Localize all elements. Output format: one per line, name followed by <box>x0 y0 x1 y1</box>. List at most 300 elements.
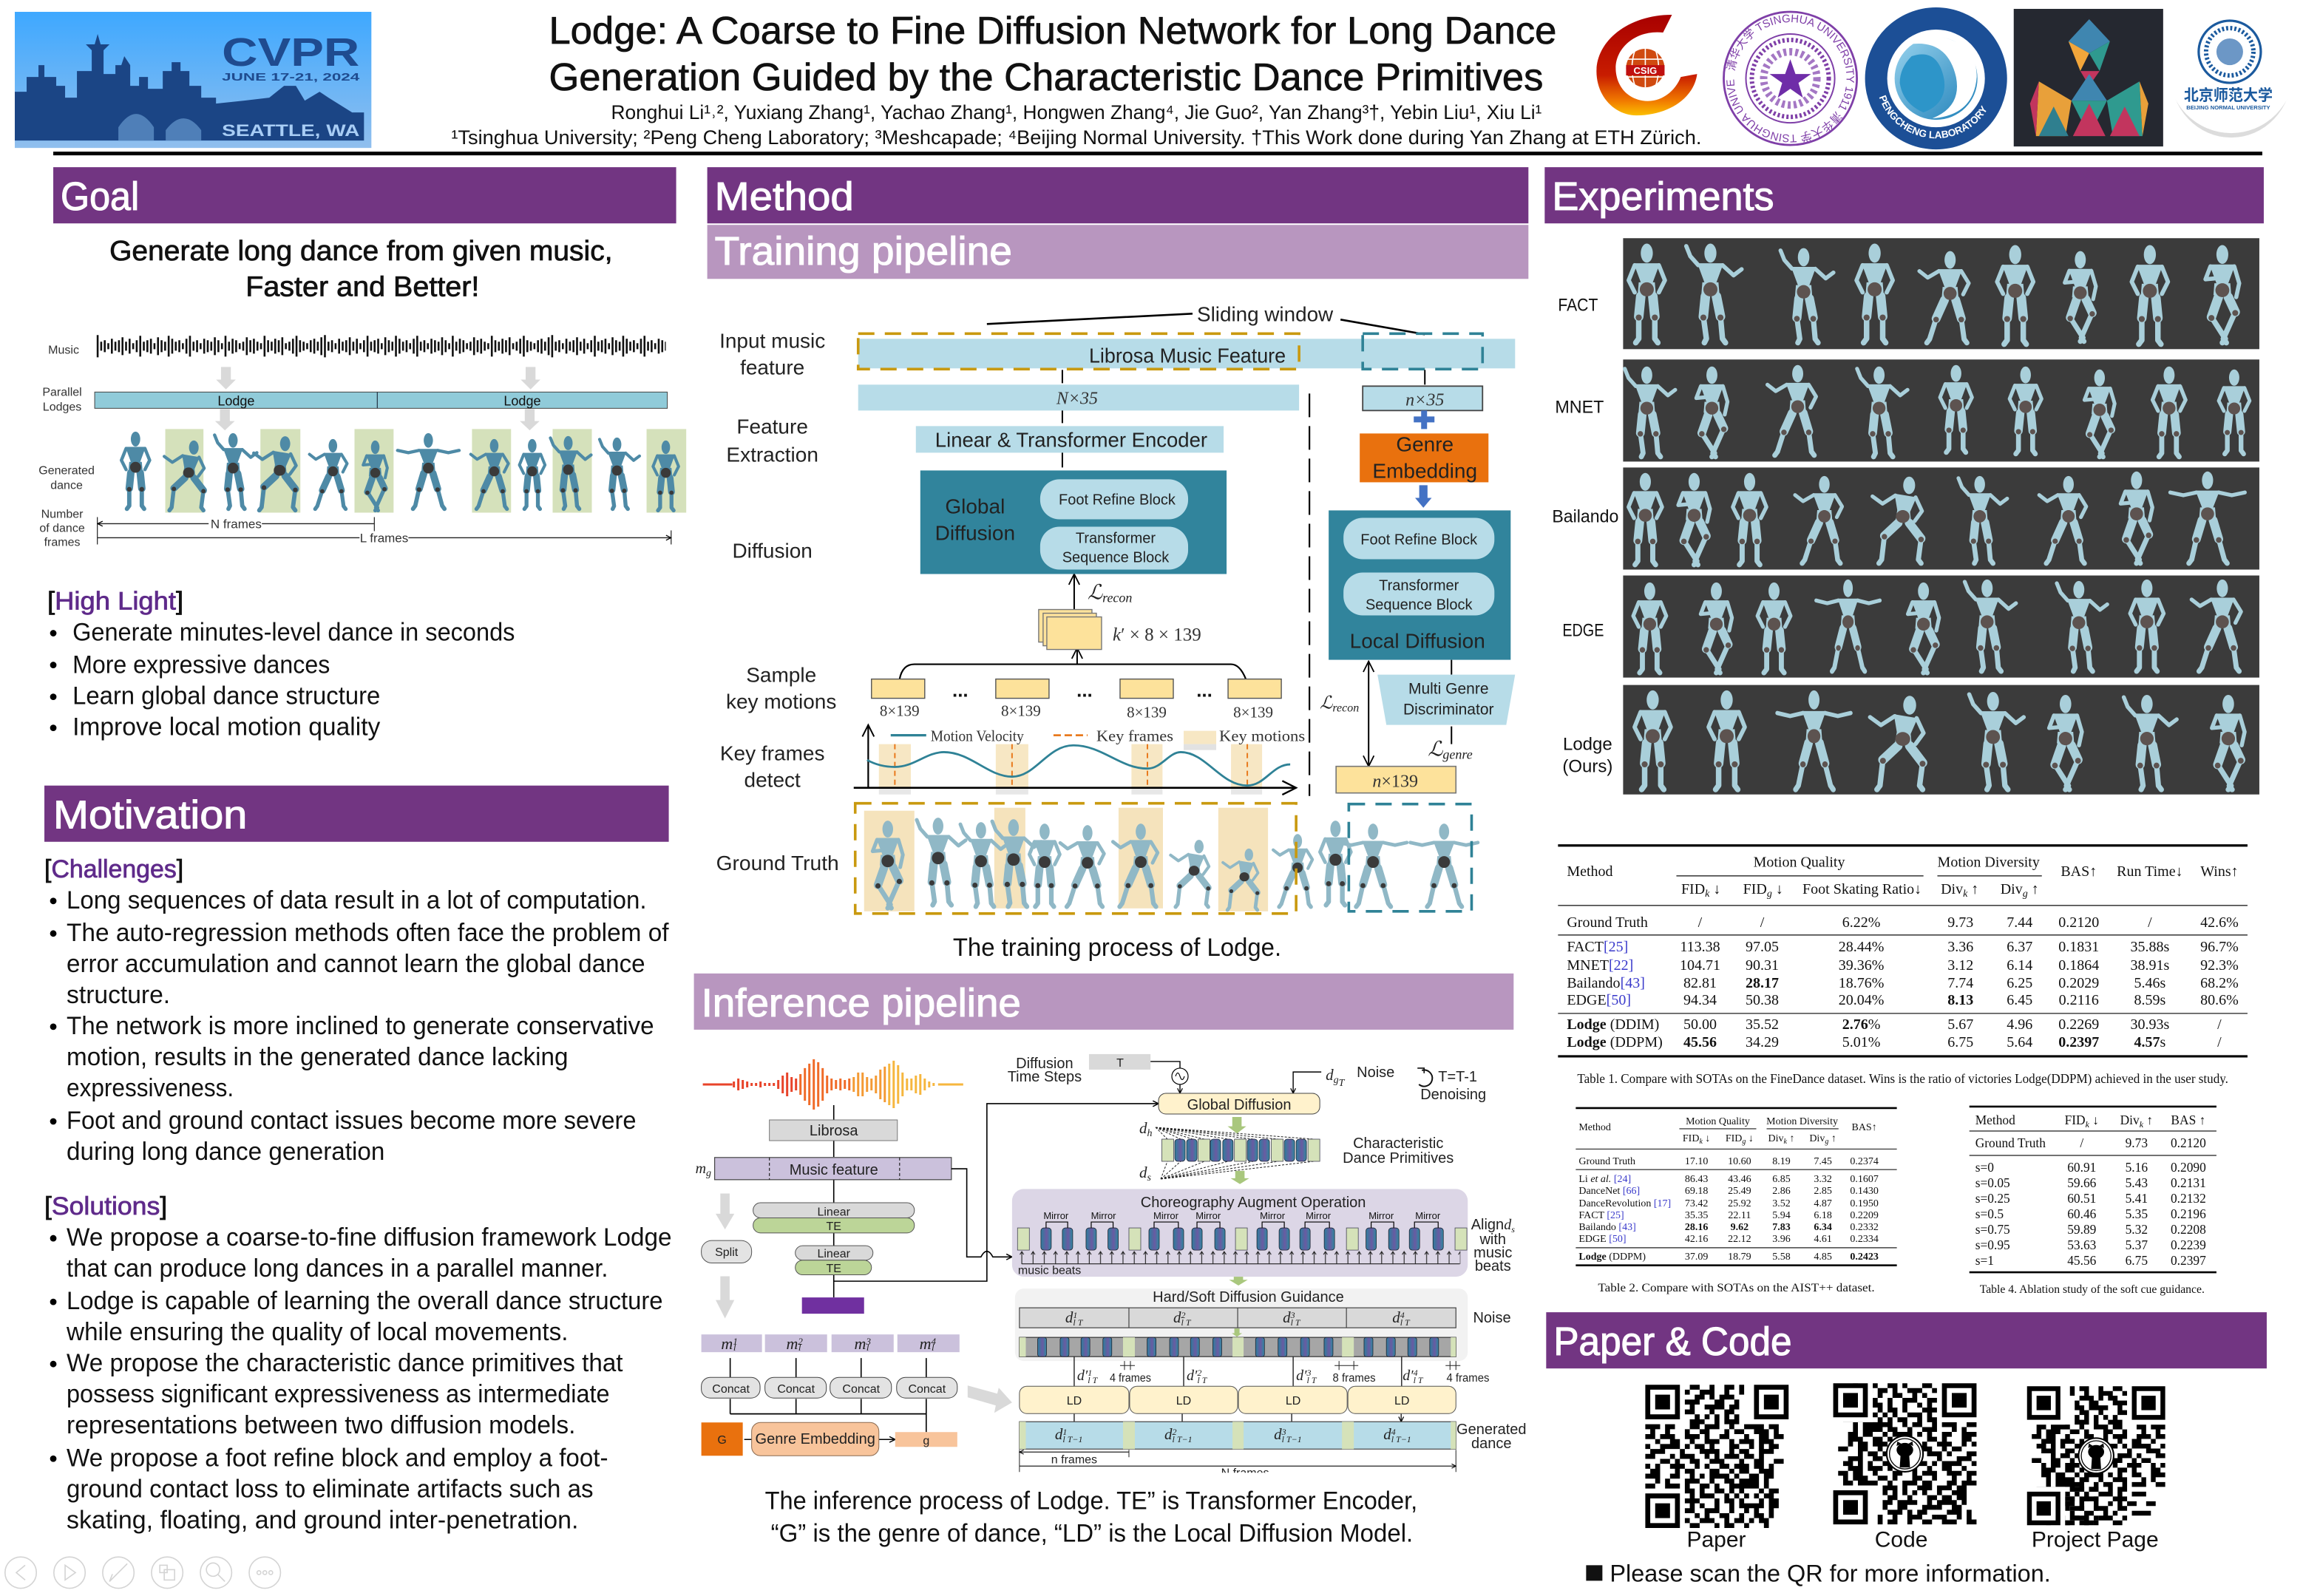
text: Solutions: Lodge is capable of learning the overall dance structure <box>67 1287 663 1315</box>
concat pills: Concat <box>842 1383 881 1396</box>
text: Solutions: We propose the characteristic dance primitives that <box>67 1349 623 1377</box>
table 2: AIST++ comparison: DanceNet [66] <box>1578 1186 1640 1197</box>
music waveform <box>96 335 666 358</box>
heading: Goal <box>53 167 676 223</box>
ground truth strip <box>855 804 1478 914</box>
denoising note <box>1417 1068 1486 1103</box>
table 1 caption: Table 1. Compare with SOTAs on the FineDance dataset. Wins is the ratio of victories Lodge(DDPM) achieved in the user study. <box>1577 1071 2228 1086</box>
overlap frame labels: 8 frames <box>1333 1372 1376 1385</box>
local transformer block <box>1343 573 1494 616</box>
table 1 baseline rows: 28.17 <box>1746 975 1779 991</box>
overlap frame labels: d′ <box>1077 1368 1088 1384</box>
align note: with <box>1479 1232 1506 1248</box>
generated segments: d <box>1164 1425 1173 1443</box>
table 4: soft cue ablation: 59.89 <box>2067 1222 2096 1237</box>
CVPR 2024 logo <box>15 12 371 148</box>
arrow: genre to local diffusion <box>1415 485 1431 508</box>
split music features: l <box>733 1342 736 1353</box>
table 1: FineDance comparison: FID <box>1681 881 1705 897</box>
small linear and TE stack: TE <box>826 1263 841 1275</box>
choreography augment operation: Mirror <box>1043 1210 1069 1221</box>
heading: Training pipeline <box>708 225 1528 279</box>
table 1 baseline rows: 82.81 <box>1683 975 1717 991</box>
QR: Project Page <box>2027 1386 2165 1552</box>
comparison row: Lodge (Ours): Lodge <box>1563 735 1612 755</box>
frame dimension lines: L frames <box>360 531 408 545</box>
table 4: soft cue ablation: 0.2132 <box>2171 1191 2206 1206</box>
noise segments <box>1020 1308 1456 1328</box>
table 4: soft cue ablation: 5.41 <box>2126 1191 2148 1206</box>
g box <box>895 1432 957 1447</box>
plus icon <box>1414 410 1434 429</box>
table 2: AIST++ comparison: 5.58 <box>1772 1252 1791 1263</box>
choreography augment operation: Mirror <box>1415 1210 1441 1221</box>
table 1 Lodge rows: 35.52 <box>1746 1016 1779 1033</box>
text: High Light: Learn global dance structure <box>72 682 380 710</box>
table 4: soft cue ablation: ↓ <box>2089 1113 2099 1127</box>
table 4: soft cue ablation: s=0 <box>1975 1160 1994 1175</box>
local diffusion boxes: LD <box>1286 1395 1300 1407</box>
table 4: soft cue ablation: BAS ↑ <box>2171 1113 2205 1127</box>
split music features: m <box>855 1334 866 1353</box>
text: High Light: Improve local motion quality <box>72 713 380 741</box>
table 1 Lodge rows: 30.93s <box>2130 1016 2169 1033</box>
table 1: FineDance comparison: Div <box>2001 881 2023 897</box>
panel: Paper and Code <box>1546 1312 2267 1586</box>
table 1 ground truth row <box>1567 914 2239 931</box>
table 1 Lodge rows: / <box>2217 1016 2222 1033</box>
table 1 baseline rows: 0.2029 <box>2058 975 2099 991</box>
table 4: soft cue ablation: 6.75 <box>2126 1253 2148 1268</box>
global diffusion box: Global Diffusion <box>1187 1097 1291 1113</box>
split music features: l <box>932 1342 935 1353</box>
table 2: AIST++ comparison: 69.18 <box>1685 1186 1708 1197</box>
local foot refine block <box>1343 517 1494 559</box>
table 1 baseline rows: 35.88s <box>2130 939 2169 955</box>
lodge bar <box>95 392 668 408</box>
table 4: soft cue ablation: 59.66 <box>2067 1175 2097 1190</box>
table 1: FineDance comparison: g <box>2023 889 2028 900</box>
generated segments: l T−1 <box>1391 1434 1411 1444</box>
noise segments: l T <box>1073 1317 1084 1328</box>
n x 139 box: n×139 <box>1372 772 1418 792</box>
music feature box <box>696 1158 952 1180</box>
table 2: AIST++ comparison: Div <box>1809 1133 1825 1144</box>
table 2: AIST++ comparison: Method <box>1578 1122 1611 1133</box>
split music features: m <box>786 1334 798 1353</box>
small linear and TE stack: Linear <box>817 1248 851 1260</box>
table 1 ground truth row: Ground Truth <box>1567 914 1648 931</box>
table 2: AIST++ comparison: g <box>1825 1138 1828 1146</box>
row labels: Feature <box>736 415 808 438</box>
comparison row: Bailando: Bailando <box>1552 506 1618 526</box>
table 2: AIST++ comparison: BAS↑ <box>1851 1122 1877 1133</box>
table 1 baseline rows: 39.36% <box>1839 957 1884 974</box>
heading: Inference pipeline <box>694 974 1513 1030</box>
table 1 Lodge rows: 45.56 <box>1683 1034 1717 1050</box>
chart legend: Key frames <box>1096 727 1173 745</box>
table 2: AIST++ comparison: 22.11 <box>1728 1210 1751 1221</box>
noise segments: 2 <box>1181 1310 1186 1320</box>
table 1: FineDance comparison: Wins↑ <box>2200 863 2239 880</box>
music feature box: Music feature <box>790 1162 878 1178</box>
concat pills: Concat <box>777 1383 815 1396</box>
foot refine block <box>1040 479 1188 519</box>
table 1 baseline rows: 18.76% <box>1839 975 1884 991</box>
text: Challenges <box>44 855 669 1166</box>
table 2: AIST++ comparison: 4.85 <box>1814 1252 1832 1263</box>
global diffusion block <box>920 470 1227 574</box>
table 1 baseline rows: 28.44% <box>1839 939 1884 955</box>
text: High Light: [High Light ] <box>47 588 183 616</box>
table 4: soft cue ablation: 60.51 <box>2067 1191 2096 1206</box>
time steps: Time Steps <box>1008 1069 1082 1085</box>
table 2: AIST++ comparison: 25.92 <box>1728 1198 1751 1209</box>
characteristic dance primitives: h <box>1147 1128 1152 1139</box>
table 2 caption: Table 2. Compare with SOTAs on the AIST++ dataset. <box>1598 1282 1875 1294</box>
sampled key motion boxes: 8×139 <box>1127 704 1167 721</box>
logo: Peng Cheng Laboratory <box>1865 7 2007 149</box>
music feature box: g <box>706 1168 711 1179</box>
sampled key motion boxes: ... <box>1076 679 1093 702</box>
table 4: soft cue ablation: s=0.05 <box>1975 1175 2010 1190</box>
table 1: FineDance comparison: Motion Diversity <box>1938 855 2040 871</box>
table 2: AIST++ comparison: 2.85 <box>1814 1186 1832 1197</box>
table 4: soft cue ablation: 45.56 <box>2067 1253 2097 1268</box>
table 4: soft cue ablation: 0.2120 <box>2171 1135 2206 1150</box>
text: Solutions: possess significant expressiveness as intermediate <box>67 1380 610 1408</box>
caption: inference: “G” is the genre of dance, “LD” is the Local Diffusion Model. <box>771 1519 1413 1547</box>
comparison row: FACT <box>1558 238 2259 349</box>
table 1: FineDance comparison: g <box>1767 889 1772 900</box>
comparison row: MNET <box>1555 359 2259 461</box>
overlap frame labels: 3 <box>1306 1368 1311 1378</box>
G box: G <box>717 1434 727 1447</box>
guided sequence <box>1020 1337 1456 1356</box>
align note: Alignd <box>1471 1217 1511 1233</box>
chart legend: Key motions <box>1219 727 1305 745</box>
segment dimension lines: n frames <box>1051 1453 1097 1466</box>
librosa box: Librosa <box>810 1123 858 1139</box>
key motions shape label: k′ × 8 × 139 <box>1113 625 1201 645</box>
local diffusion block <box>1329 510 1510 660</box>
generated dance figures <box>121 432 679 511</box>
heading: Method: Method <box>715 174 854 219</box>
CVPR 2024 logo: SEATTLE, WA <box>222 121 359 140</box>
table 1 baseline rows: 80.6% <box>2200 992 2239 1008</box>
table 4: soft cue ablation: s=0.95 <box>1975 1237 2010 1252</box>
sampled key motion boxes: 8×139 <box>1001 702 1041 720</box>
table 1: FineDance comparison: Method <box>1567 863 1613 880</box>
choreography augment operation: music beats <box>1018 1265 1081 1277</box>
overlap frame labels: d′ <box>1187 1368 1197 1384</box>
split pill: Split <box>715 1246 739 1259</box>
diagram: parallel lodges: of dance <box>39 522 85 534</box>
panel: Method <box>694 167 1528 1547</box>
overlap frame labels: l T <box>1088 1375 1099 1385</box>
table 4: soft cue ablation: s=0.75 <box>1975 1222 2010 1237</box>
table 1 baseline rows: 8.59s <box>2134 992 2165 1008</box>
text: Challenges: structure. <box>67 981 170 1009</box>
row labels: key motions <box>726 690 836 713</box>
table 2: AIST++ comparison: 22.12 <box>1728 1234 1751 1245</box>
generated segments <box>1020 1422 1456 1449</box>
row labels: Input music <box>719 329 825 352</box>
table 1 baseline rows: 0.1864 <box>2058 957 2099 974</box>
librosa music feature bar <box>858 333 1515 369</box>
comparison row: Lodge (Ours) <box>1562 685 2259 795</box>
generated segments: l T−1 <box>1282 1434 1302 1444</box>
table 2: AIST++ comparison: 4.61 <box>1814 1234 1832 1245</box>
table 1: FineDance comparison: Foot Skating Ratio↓ <box>1802 881 1922 897</box>
table 1 baseline rows: 8.13 <box>1947 992 1973 1008</box>
table 2: AIST++ comparison: 7.45 <box>1814 1156 1832 1167</box>
table 2: AIST++ comparison: 25.49 <box>1728 1186 1751 1197</box>
title: Generation Guided by the Characteristic Dance Primitives <box>549 56 1543 99</box>
table 1 Lodge rows: / <box>2217 1034 2222 1050</box>
authors: Ronghui Li¹˒², Yuxiang Zhang¹, Yachao Zhang¹, Hongwen Zhang⁴, Jie Guo², Yan Zhang³†, Yebin Liu¹, Xiu Li¹ <box>611 101 1541 123</box>
split music features: 2 <box>798 1336 803 1347</box>
table 1 Lodge rows: Lodge (DDIM) <box>1567 1016 1659 1033</box>
text: Challenges: motion, results in the generated dance lacking <box>67 1043 568 1071</box>
row labels: Extraction <box>726 443 818 466</box>
table 2: AIST++ comparison: 42.16 <box>1685 1234 1708 1245</box>
table 2: AIST++ comparison: FID <box>1683 1133 1699 1144</box>
multi genre discriminator: Multi Genre <box>1408 681 1489 698</box>
align note: s <box>1511 1224 1515 1235</box>
text: Solutions <box>44 1192 672 1534</box>
table 2: AIST++ comparison: 86.43 <box>1685 1174 1708 1185</box>
table 1 baseline rows: FACT[25] <box>1567 939 1628 955</box>
local diffusion boxes: LD <box>1394 1395 1409 1407</box>
n x 139 box <box>1336 767 1456 793</box>
table 4: soft cue ablation: 5.43 <box>2126 1175 2148 1190</box>
table 2: AIST++ comparison: 73.42 <box>1685 1198 1708 1209</box>
choreography augment operation <box>1012 1189 1468 1277</box>
diagram: inference pipeline <box>696 1054 1527 1479</box>
panel: Experiments <box>1544 167 2264 1296</box>
local transformer block: Sequence Block <box>1366 597 1473 614</box>
table 4: soft cue ablation: 0.2131 <box>2171 1175 2206 1190</box>
row labels: Key frames <box>720 742 824 765</box>
table 4: soft cue ablation: 60.46 <box>2067 1206 2097 1221</box>
sampled key motion boxes: 8×139 <box>880 702 920 720</box>
CVPR 2024 logo: JUNE 17-21, 2024 <box>222 71 360 84</box>
segment dimension lines: N frames <box>1221 1467 1269 1479</box>
noise segments: d <box>1173 1308 1181 1326</box>
table 4: soft cue ablation <box>1970 1107 2216 1296</box>
table 1: FineDance comparison <box>1558 846 2248 1086</box>
table 1 baseline rows: 7.74 <box>1947 975 1973 991</box>
characteristic dance primitives: d <box>1139 1119 1147 1137</box>
generated segments: l T−1 <box>1173 1434 1193 1444</box>
table 4: soft cue ablation: Method <box>1975 1113 2015 1127</box>
noise input: g <box>1334 1075 1339 1086</box>
transformer sequence block <box>1040 526 1188 570</box>
generated segments: 3 <box>1281 1427 1286 1437</box>
comparison row: MNET: MNET <box>1555 397 1604 417</box>
arrows: feature flow <box>1062 370 1451 744</box>
table 2: AIST++ comparison: 35.35 <box>1685 1210 1708 1221</box>
choreography augment operation: Mirror <box>1306 1210 1332 1221</box>
diagram: parallel lodges <box>38 335 776 549</box>
table 1 baseline rows: 6.14 <box>2007 957 2032 974</box>
table 1: FineDance comparison: FID <box>1743 881 1767 897</box>
time steps: T <box>1116 1057 1124 1070</box>
table 1 baseline rows: 97.05 <box>1746 939 1779 955</box>
table 1 baseline rows: MNET[22] <box>1567 957 1633 974</box>
table 1 baseline rows: 20.04% <box>1839 992 1884 1008</box>
noise input: T <box>1339 1078 1346 1089</box>
table 2: AIST++ comparison: 0.2332 <box>1850 1222 1879 1233</box>
overlap frame labels: 4 frames <box>1446 1372 1489 1385</box>
local diffusion boxes: LD <box>1176 1395 1191 1407</box>
gray split arrows <box>716 1193 734 1319</box>
local reconstruction loss: recon <box>1332 702 1359 715</box>
local diffusion boxes: LD <box>1067 1395 1082 1407</box>
text: High Light: More expressive dances <box>72 651 330 679</box>
sampled key motion boxes <box>872 679 1281 721</box>
affiliations: ¹Tsinghua University; ²Peng Cheng Laboratory; ³Meshcapade; ⁴Beijing Normal University. †This Work done during Yan Zhang at ETH Zürich. <box>451 126 1701 149</box>
heading: Experiments: Experiments <box>1552 174 1774 219</box>
table 2: AIST++ comparison: 3.96 <box>1772 1234 1791 1245</box>
table 1 ground truth row: / <box>1698 914 1703 931</box>
local diffusion block: Local Diffusion <box>1350 630 1485 653</box>
caption: training: The training process of Lodge. <box>953 934 1281 962</box>
arrows: segments to LD <box>1074 1356 1402 1422</box>
table 1 Lodge rows: 34.29 <box>1746 1034 1779 1050</box>
table 2: AIST++ comparison: 37.09 <box>1685 1252 1708 1263</box>
table 1 baseline rows: 104.71 <box>1680 957 1720 974</box>
generated dance label: dance <box>1471 1436 1512 1452</box>
table 1 baseline rows: 0.1831 <box>2058 939 2099 955</box>
table 1 Lodge rows: 4.57s <box>2134 1034 2165 1050</box>
table 2: AIST++ comparison: 3.52 <box>1772 1198 1791 1209</box>
concat pills: Concat <box>908 1383 946 1396</box>
align note: music <box>1473 1245 1512 1261</box>
multi genre discriminator <box>1377 675 1515 725</box>
text: Challenges: The network is more inclined to generate conservative <box>67 1012 654 1040</box>
split music features: m <box>721 1334 733 1353</box>
table 2: AIST++ comparison: 0.2334 <box>1850 1234 1879 1245</box>
table 1 Lodge rows: 2.76% <box>1842 1016 1880 1033</box>
table 2: AIST++ comparison: 6.18 <box>1814 1210 1832 1221</box>
genre embedding <box>1360 432 1488 482</box>
table 4: soft cue ablation: 0.2397 <box>2171 1253 2206 1268</box>
table 2: AIST++ comparison: 2.86 <box>1772 1186 1791 1197</box>
genre loss: genre <box>1442 747 1473 762</box>
table 4: soft cue ablation: k <box>2086 1119 2090 1130</box>
table 1 baseline rows: 94.34 <box>1683 992 1717 1008</box>
QR: Paper <box>1645 1385 1788 1552</box>
characteristic dance primitives <box>1139 1119 1454 1184</box>
text: Challenges: The auto-regression methods often face the problem of <box>67 919 669 947</box>
table 1 ground truth row: / <box>1760 914 1765 931</box>
table 2: AIST++ comparison: 10.60 <box>1728 1156 1751 1167</box>
logo: Peng Cheng Laboratory: PENGCHENG LABORATORY <box>1879 95 1986 139</box>
table 4: soft cue ablation: 5.32 <box>2126 1222 2148 1237</box>
table 4: soft cue ablation: 5.35 <box>2126 1206 2148 1221</box>
generated segments: d <box>1274 1425 1282 1443</box>
header divider <box>53 152 2262 155</box>
noise segments: l T <box>1181 1317 1192 1328</box>
diagram: parallel lodges: Generated <box>38 464 95 477</box>
table 2: AIST++ comparison: 28.16 <box>1685 1222 1708 1233</box>
text: Challenges: Foot and ground contact issues become more severe <box>67 1107 637 1135</box>
G box <box>702 1422 743 1456</box>
table 2: AIST++ comparison: 17.10 <box>1685 1156 1708 1167</box>
table 1 Lodge rows: 50.00 <box>1683 1016 1717 1033</box>
comparison row: EDGE: EDGE <box>1562 621 1604 641</box>
row labels: feature <box>740 356 804 378</box>
table 1 Lodge rows: 5.67 <box>1947 1016 1973 1033</box>
denoising note: Denoising <box>1420 1087 1486 1103</box>
connector: encoder to global diffusion <box>834 1104 1159 1281</box>
concat pills <box>702 1377 957 1398</box>
local diffusion boxes <box>1020 1386 1456 1413</box>
concat pills: Concat <box>712 1383 750 1396</box>
genre embedding: Embedding <box>1372 459 1477 482</box>
noise segments: d <box>1283 1308 1291 1326</box>
table 2: AIST++ comparison: ↑ <box>1787 1133 1795 1144</box>
table 1: FineDance comparison: Motion Quality <box>1754 855 1845 871</box>
table 4: soft cue ablation: 0.2196 <box>2171 1206 2206 1221</box>
table 1 baseline rows: 0.2116 <box>2059 992 2099 1008</box>
heading: Motivation: Motivation <box>53 793 247 838</box>
generated segments: 1 <box>1062 1427 1067 1437</box>
linear and TE stack: TE <box>826 1220 841 1233</box>
table 2: AIST++ comparison: ↓ <box>1703 1133 1710 1144</box>
logo: dark mosaic figure <box>2014 9 2163 146</box>
table 2: AIST++ comparison: FACT [25] <box>1578 1210 1624 1221</box>
text: High Light: Generate minutes-level dance in seconds <box>72 619 515 647</box>
text: Challenges: expressiveness. <box>67 1074 234 1102</box>
generated dance label <box>1456 1422 1527 1452</box>
table 1: FineDance comparison: ↓ <box>1772 881 1783 897</box>
global diffusion block: Diffusion <box>935 521 1015 544</box>
QR: Project Page: Project Page <box>2032 1527 2159 1552</box>
linear and transformer encoder: Linear & Transformer Encoder <box>935 428 1207 451</box>
librosa music feature bar: Librosa Music Feature <box>1089 344 1286 367</box>
heading: Paper and Code <box>1546 1312 2267 1368</box>
noise input: d <box>1326 1066 1334 1084</box>
caption: inference: The inference process of Lodge. TE” is Transformer Encoder, <box>765 1487 1417 1515</box>
local foot refine block: Foot Refine Block <box>1360 532 1478 548</box>
table 2: AIST++ comparison: 3.32 <box>1814 1174 1832 1185</box>
characteristic dance primitives: Characteristic <box>1353 1135 1443 1152</box>
table 1: FineDance comparison: ↓ <box>1709 881 1720 897</box>
table 1 ground truth row: / <box>2148 914 2152 931</box>
table 1 baseline rows: EDGE[50] <box>1567 992 1631 1008</box>
table 2: AIST++ comparison: 0.1430 <box>1850 1186 1879 1197</box>
table 2: AIST++ comparison: 0.2209 <box>1850 1210 1879 1221</box>
table 1: FineDance comparison: Run Time↓ <box>2117 863 2183 880</box>
overlap frame labels: 1 <box>1088 1368 1092 1378</box>
table 1 Lodge rows: 5.64 <box>2007 1034 2032 1050</box>
toolbar icons <box>5 1557 280 1589</box>
local reconstruction loss: ℒ <box>1320 694 1332 713</box>
sliding window: Sliding window <box>1197 302 1334 325</box>
linear and TE stack <box>753 1203 915 1233</box>
comparison row: Bailando <box>1552 467 2259 570</box>
split music features: 4 <box>931 1336 936 1347</box>
table 4: soft cue ablation: 5.16 <box>2126 1160 2148 1175</box>
generated segments: d <box>1383 1425 1391 1443</box>
transformer sequence block: Transformer <box>1076 530 1156 546</box>
table 4: soft cue ablation: Ground Truth <box>1975 1135 2046 1150</box>
sampled key motion boxes: ... <box>952 679 969 702</box>
table 2: AIST++ comparison: g <box>1742 1138 1746 1146</box>
